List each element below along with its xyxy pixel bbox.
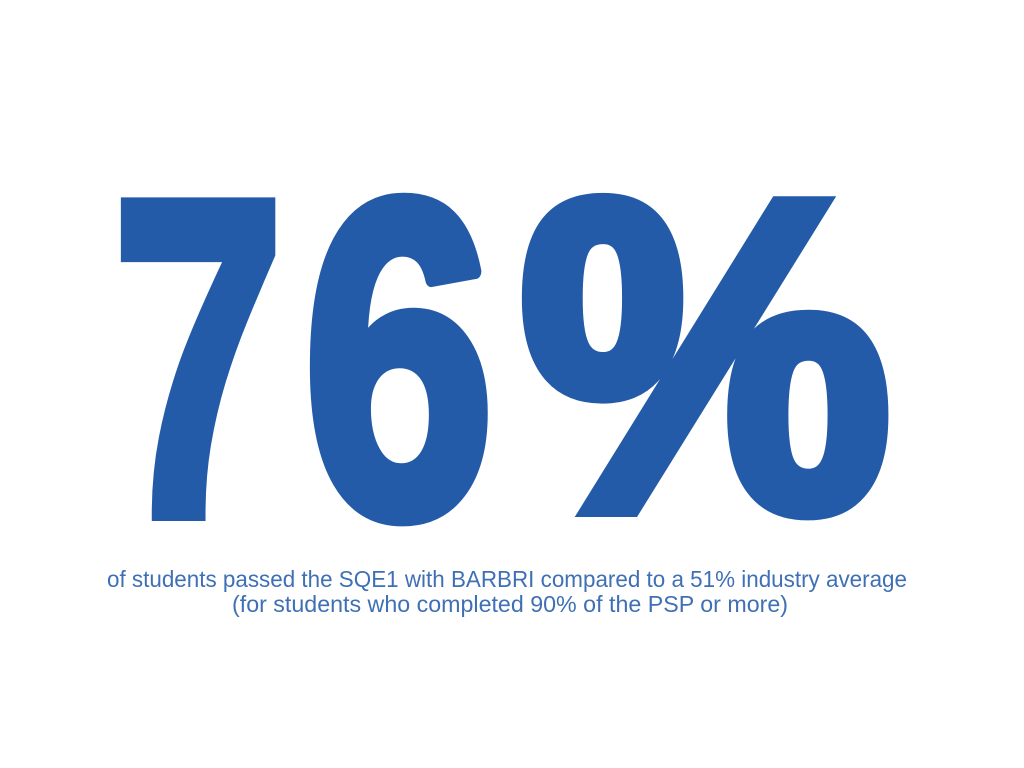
big statistic: 76% xyxy=(112,107,891,610)
caption: (for students who completed 90% of the PSP or more) xyxy=(232,591,788,617)
caption: of students passed the SQE1 with BARBRI compared to a 51% industry average xyxy=(107,566,907,592)
big statistic: 76%: % xyxy=(520,110,891,601)
big statistic: 76%: 6 xyxy=(303,107,494,610)
caption xyxy=(107,566,907,617)
big statistic: 76%: 7 xyxy=(112,107,284,610)
